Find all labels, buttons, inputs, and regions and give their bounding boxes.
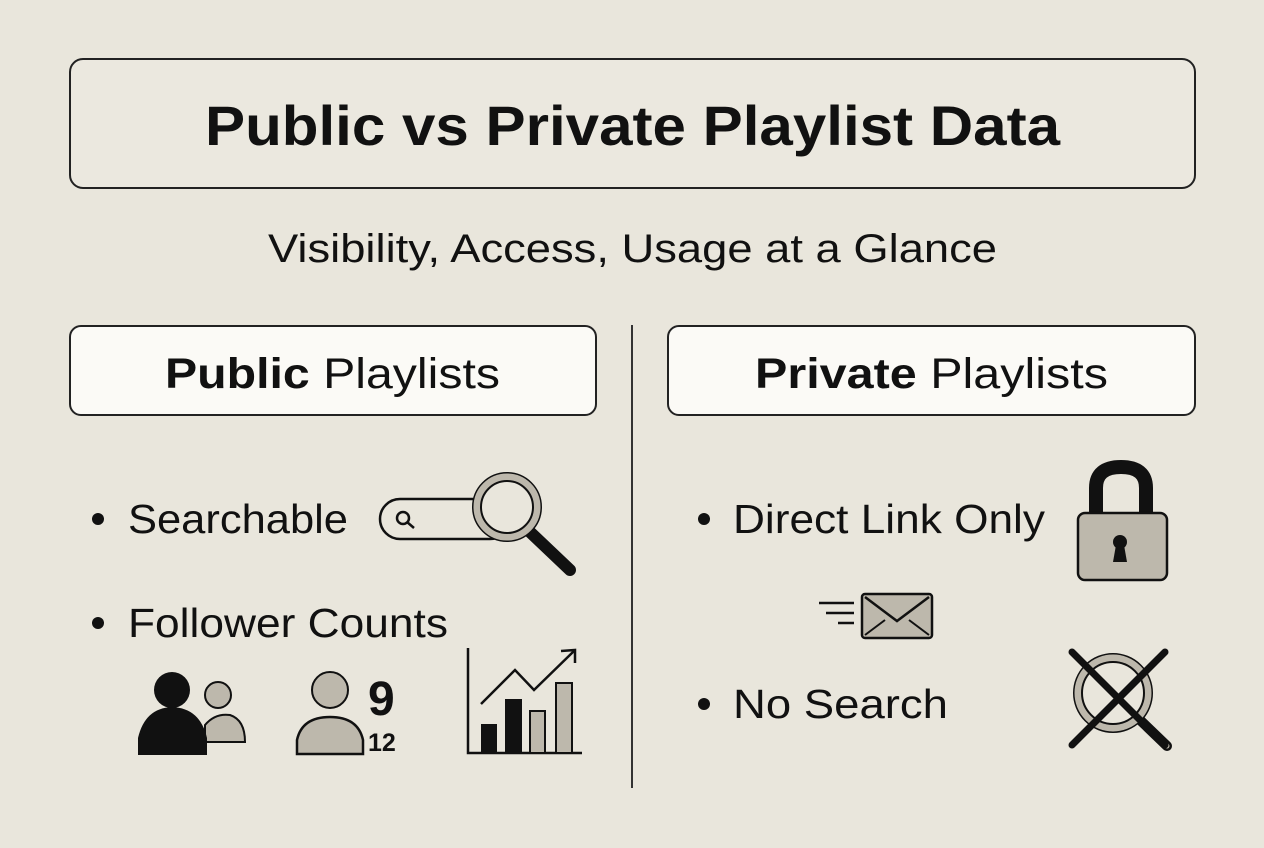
heading: public playlists <box>70 326 596 415</box>
icon: envelope <box>819 594 932 638</box>
subtitle: Visibility, Access, Usage at a Glance <box>268 227 997 271</box>
bullet: no search: No Search <box>733 681 948 727</box>
heading: private playlists <box>668 326 1195 415</box>
heading: private playlists: Private Playlists <box>755 350 1108 398</box>
panel: public <box>70 326 596 757</box>
title <box>70 59 1195 188</box>
icon: growth chart <box>468 648 582 753</box>
bullet: follower counts: Follower Counts <box>128 600 448 646</box>
icon: lock <box>1078 467 1167 580</box>
heading: public playlists: Public Playlists <box>165 350 500 398</box>
panel: private <box>668 326 1195 746</box>
title: Public vs Private Playlist Data <box>205 94 1061 157</box>
icon: crossed-out search <box>1072 652 1167 746</box>
bullet: direct link only: Direct Link Only <box>733 496 1046 542</box>
icon: search bar with magnifier <box>380 473 570 570</box>
bullet: searchable: Searchable <box>128 496 348 542</box>
icon: follower count person: 12 <box>368 729 396 757</box>
icon: follower count person: 9 <box>368 673 395 726</box>
icon: follower count person <box>297 672 396 757</box>
icon: people <box>138 672 245 755</box>
